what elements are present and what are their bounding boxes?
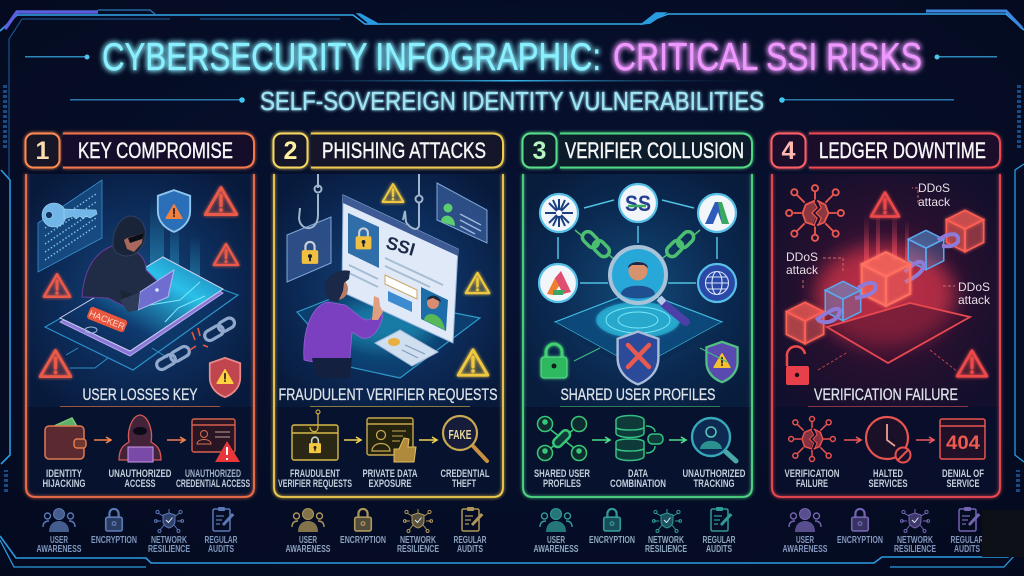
number badge 3: 3 xyxy=(533,137,546,165)
flow icon: 404 window xyxy=(940,419,985,459)
flow arrow xyxy=(592,437,610,443)
connector lines xyxy=(574,348,727,362)
panel body: key compromise xyxy=(26,174,254,497)
title and subtitle accent lines xyxy=(25,54,997,103)
panel body: phishing attacks xyxy=(274,174,503,497)
flow icon: hooked window xyxy=(292,410,338,460)
flow labels: DATA xyxy=(628,468,648,480)
light beams xyxy=(864,205,909,265)
DDoS labels: DDoS xyxy=(958,280,990,294)
flow labels: VERIFICATION xyxy=(784,468,840,480)
glow xyxy=(815,245,955,345)
dark patch lower right xyxy=(982,510,1024,557)
mitigations row: ENCRYPTION xyxy=(589,535,635,546)
mitigations row: AWARENESS xyxy=(534,544,579,555)
number badge 1 xyxy=(26,134,60,168)
flow labels: CREDENTIAL xyxy=(440,468,490,480)
flow labels: COMBINATION xyxy=(610,478,666,490)
verifier logo: globe xyxy=(698,264,736,302)
mitigations row xyxy=(534,507,736,555)
icon: broken chain xyxy=(155,316,236,371)
number badge 4 xyxy=(772,134,806,168)
mitigations row: AUDITS xyxy=(457,544,483,555)
blockchain xyxy=(786,210,984,344)
panel: key compromise xyxy=(26,134,254,555)
flow icon: tracking magnifier xyxy=(692,418,736,461)
heading: key compromise xyxy=(63,134,254,168)
illustration: hacker on phone xyxy=(38,180,240,397)
title: CYBERSECURITY INFOGRAPHIC: xyxy=(102,36,601,79)
DDoS labels: DDoS xyxy=(786,250,818,264)
DDoS labels: attack xyxy=(918,195,951,209)
green lock xyxy=(541,344,567,378)
panel body: ledger downtime xyxy=(772,174,1000,497)
flow icon: credential alert xyxy=(192,419,240,462)
DDoS labels xyxy=(786,181,991,307)
mitigations row xyxy=(286,507,487,555)
number badge 2: 2 xyxy=(284,137,297,165)
mitigations row: NETWORK xyxy=(648,535,685,546)
mitigations row: RESILIENCE xyxy=(148,544,190,555)
title: CRITICAL SSI RISKS xyxy=(613,36,922,79)
caption: USER LOSSES KEY xyxy=(82,386,198,404)
heading: verifier collusion xyxy=(560,134,752,168)
subtitle: SELF-SOVEREIGN IDENTITY VULNERABILITIES xyxy=(260,86,764,116)
mitigations row: REGULAR xyxy=(454,535,487,546)
flow labels xyxy=(42,468,250,490)
illustration: broken ledger xyxy=(786,181,991,385)
mitigations row: REGULAR xyxy=(950,535,984,546)
warning shield xyxy=(706,342,738,382)
warning icons xyxy=(40,188,238,377)
mitigations row: RESILIENCE xyxy=(397,544,439,555)
ID card xyxy=(375,330,438,366)
flow labels: HALTED xyxy=(873,468,903,480)
mitigations row: NETWORK xyxy=(151,535,188,546)
connector traces xyxy=(66,348,168,368)
DDoS labels: attack xyxy=(786,263,819,277)
flow icon: shared chain xyxy=(538,416,586,460)
flow icon: database xyxy=(616,416,663,460)
phishing browser window xyxy=(342,195,458,343)
icon: smartphone: HACKER xyxy=(88,308,127,332)
panel body: verifier collusion xyxy=(523,174,752,497)
flow icon: halted clock xyxy=(866,417,910,462)
mitigations row: ENCRYPTION xyxy=(837,535,883,546)
mitigations row: NETWORK xyxy=(897,535,934,546)
flow arrow xyxy=(916,437,934,443)
warning icons xyxy=(871,192,987,376)
caption: FRAUDULENT VERIFIER REQUESTS xyxy=(278,386,498,404)
number badge 4: 4 xyxy=(782,137,796,165)
mitigations row: ENCRYPTION xyxy=(340,535,386,546)
flow labels: DENIAL OF xyxy=(942,468,984,480)
flow labels: FRAUDULENT xyxy=(290,468,340,480)
platform xyxy=(818,303,970,372)
verifier logo: SS xyxy=(619,184,657,222)
number badge 3 xyxy=(522,134,556,168)
number badge 1: 1 xyxy=(36,137,50,165)
panel: verifier collusion xyxy=(522,134,752,555)
chain links xyxy=(575,229,700,260)
verifier logo: A blue green xyxy=(698,194,736,232)
verifier logo: star xyxy=(540,194,578,232)
heading: ledger downtime xyxy=(809,134,1000,168)
mitigations row: USER xyxy=(50,535,68,546)
flow labels: THEFT xyxy=(452,478,476,490)
flow labels: UNAUTHORIZED xyxy=(185,468,241,480)
mitigations row: AWARENESS xyxy=(36,544,82,555)
flow labels xyxy=(784,468,984,490)
caption: SHARED USER PROFILES xyxy=(560,386,716,404)
hacker figure xyxy=(82,216,158,308)
flow labels: ACCESS xyxy=(124,478,156,490)
verifier logo: A multicolour xyxy=(539,264,577,302)
mitigations row: NETWORK xyxy=(400,535,437,546)
flow icon: hacker xyxy=(119,415,161,462)
mitigations row: AWARENESS xyxy=(782,544,828,555)
flow labels xyxy=(534,468,746,490)
flow arrow xyxy=(94,437,111,443)
mitigations row: USER xyxy=(796,535,814,546)
mitigations row: REGULAR xyxy=(702,535,736,546)
flow labels: UNAUTHORIZED xyxy=(682,468,746,480)
flow labels xyxy=(278,468,490,490)
flow labels: UNAUTHORIZED xyxy=(108,468,172,480)
flow arrow xyxy=(419,437,437,443)
right mini window xyxy=(437,183,487,243)
icon: broken hub xyxy=(786,185,844,241)
warning icons xyxy=(382,184,489,375)
flow icon: wallet xyxy=(45,418,86,459)
magnifier with user xyxy=(610,247,686,322)
flow icon: fake magnifier xyxy=(443,416,487,461)
DDoS labels: DDoS xyxy=(918,181,950,195)
flow arrow xyxy=(844,437,861,443)
heading: verifier collusion: VERIFIER COLLUSION xyxy=(565,138,744,163)
flow icon: fake magnifier: FAKE xyxy=(448,427,472,442)
network arrows xyxy=(558,200,717,283)
platform xyxy=(45,265,238,370)
fish hooks xyxy=(299,174,422,229)
flow arrow xyxy=(344,437,361,443)
heading: phishing attacks xyxy=(311,134,503,168)
flow labels: PRIVATE DATA xyxy=(362,468,418,480)
illustration: phishing site xyxy=(287,174,489,378)
shield: red xyxy=(210,358,240,397)
flow labels: PROFILES xyxy=(543,478,581,490)
open lock xyxy=(786,346,809,385)
mitigations row: ENCRYPTION xyxy=(91,535,137,546)
flow labels: EXPOSURE xyxy=(368,478,412,490)
mitigations row: RESILIENCE xyxy=(894,544,936,555)
mitigations row: USER xyxy=(299,535,317,546)
panel: ledger downtime xyxy=(772,134,1000,555)
mitigations row: AWARENESS xyxy=(286,544,331,555)
platform xyxy=(297,292,480,378)
flow labels: VERIFIER REQUESTS xyxy=(278,478,352,490)
shield: blue xyxy=(158,190,190,232)
icon: key xyxy=(42,203,97,227)
flow arrow xyxy=(167,437,185,443)
heading: key compromise: KEY COMPROMISE xyxy=(78,138,233,163)
shield with X xyxy=(618,332,658,384)
flow icon: private data xyxy=(367,418,416,462)
flow labels: SHARED USER xyxy=(534,468,590,480)
icon: laptop xyxy=(120,270,174,312)
person xyxy=(304,270,383,378)
mitigations row: RESILIENCE xyxy=(645,544,687,555)
phishing browser window: SSI xyxy=(384,233,417,260)
flow labels: SERVICE xyxy=(946,478,980,490)
code wall xyxy=(38,180,102,272)
flow labels: HIJACKING xyxy=(42,478,86,490)
number badge 2 xyxy=(274,134,308,168)
flow labels: FAILURE xyxy=(796,478,828,490)
mitigations row: AUDITS xyxy=(706,544,732,555)
flow labels: SERVICES xyxy=(868,478,908,490)
flow labels: CREDENTIAL ACCESS xyxy=(176,478,250,490)
flow labels: TRACKING xyxy=(694,478,734,490)
caption: VERIFICATION FAILURE xyxy=(814,386,958,404)
mitigations row: AUDITS xyxy=(954,544,980,555)
heading: phishing attacks: PHISHING ATTACKS xyxy=(322,138,486,163)
mitigations row: AUDITS xyxy=(208,544,234,555)
left mini window xyxy=(287,217,331,282)
flow icon: 404 window: 404 xyxy=(946,433,980,454)
flow icon: verification hub xyxy=(789,416,835,462)
mitigations row: USER xyxy=(547,535,565,546)
mitigations row: REGULAR xyxy=(204,535,238,546)
panel: phishing attacks xyxy=(274,134,503,555)
mitigations row xyxy=(36,507,238,555)
icon: smartphone xyxy=(60,257,223,356)
flow labels: IDENTITY xyxy=(46,468,82,480)
DDoS labels: attack xyxy=(958,293,991,307)
mitigations row xyxy=(782,507,984,555)
verifier logo: SS: SS xyxy=(625,191,651,216)
flow arrow xyxy=(669,437,686,443)
illustration: colluding verifiers xyxy=(539,184,738,384)
platform xyxy=(555,290,722,374)
